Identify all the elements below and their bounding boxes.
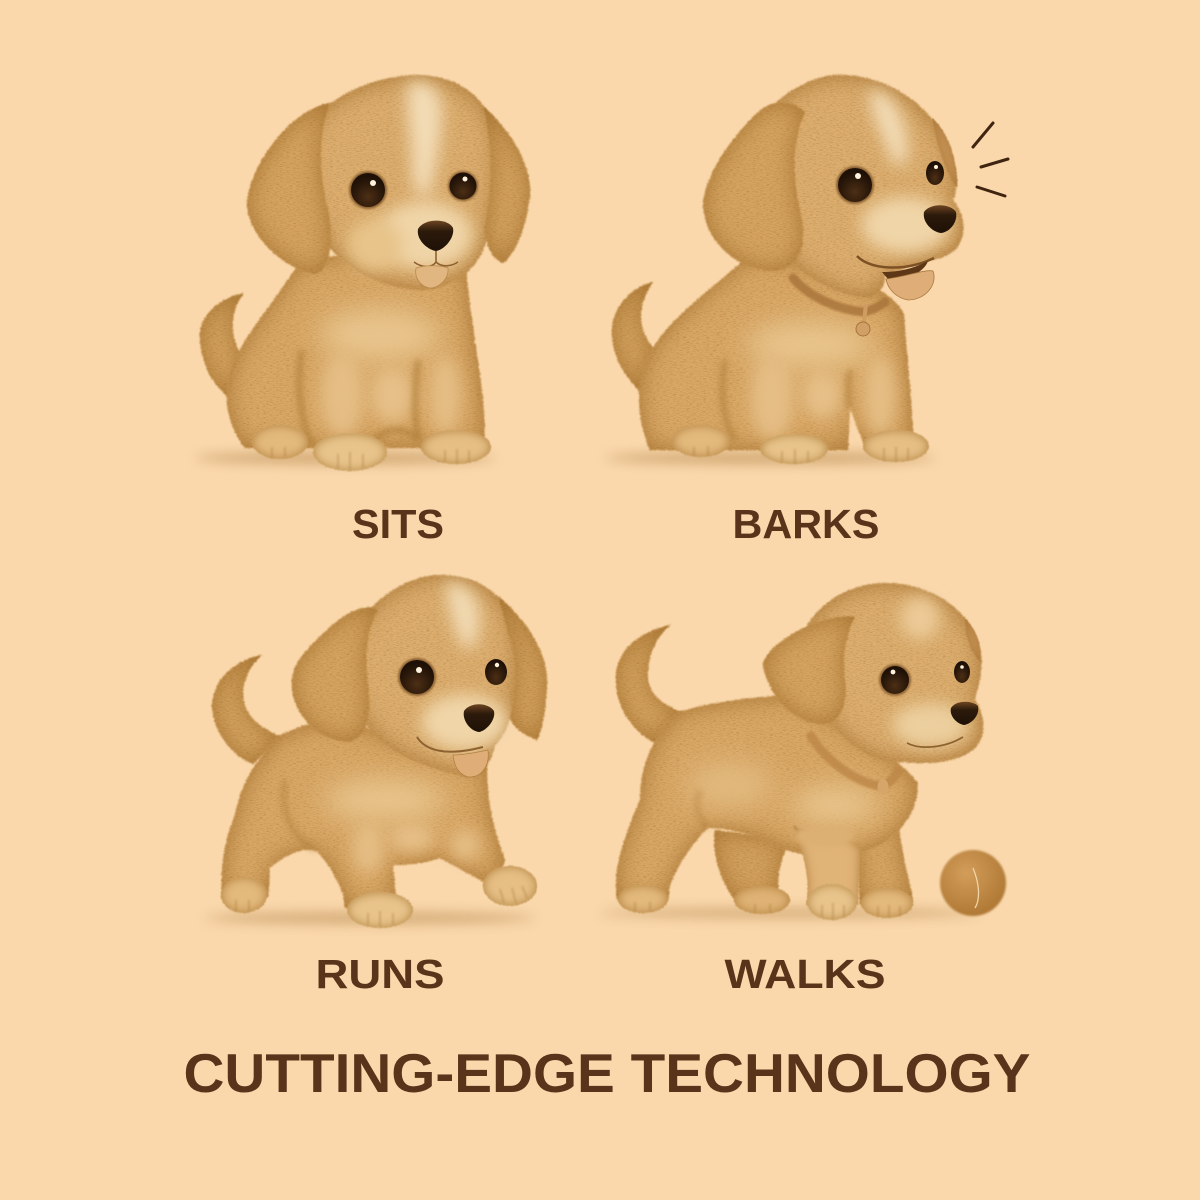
icon: bark lines — [973, 123, 1008, 196]
nose and mouth — [417, 704, 494, 777]
body — [222, 721, 505, 908]
label: walks: WALKS — [724, 951, 886, 997]
puppy: walks — [600, 583, 1006, 920]
nose and mouth — [414, 221, 458, 288]
forehead stripe and muzzle — [861, 88, 949, 253]
head — [799, 583, 983, 763]
nose and open mouth — [857, 205, 956, 300]
hidden back leg — [815, 400, 848, 450]
body shading and chest highlight — [299, 307, 461, 445]
ball — [940, 850, 1006, 916]
eyes — [879, 661, 970, 696]
head — [749, 75, 963, 298]
label: sits: SITS — [352, 501, 444, 547]
label: runs: RUNS — [316, 951, 444, 997]
eyes — [349, 171, 478, 209]
label: barks: BARKS — [732, 501, 880, 547]
eyes — [836, 161, 944, 204]
body shading and chest highlight — [722, 320, 896, 440]
body highlights — [284, 778, 480, 874]
left ear — [703, 103, 805, 271]
head — [299, 75, 498, 290]
body — [616, 695, 917, 900]
right ear — [483, 106, 530, 263]
left ear — [292, 608, 378, 742]
puppy: runs — [205, 575, 547, 928]
collar tag — [856, 304, 870, 336]
ground shadow — [205, 912, 535, 924]
far front leg — [855, 800, 913, 905]
body — [639, 255, 914, 450]
forehead and muzzle highlights — [892, 596, 968, 747]
body highlights — [685, 761, 880, 828]
paws — [618, 884, 913, 920]
ground shadow — [195, 452, 495, 464]
ground shadow — [605, 452, 935, 464]
forehead stripe and muzzle — [421, 582, 509, 750]
paws — [252, 425, 491, 471]
near leg blend — [795, 825, 855, 847]
right ear — [965, 618, 980, 662]
paws — [672, 425, 929, 464]
collar — [811, 736, 898, 786]
right ear — [498, 596, 547, 740]
collar tag — [878, 779, 888, 795]
tail — [612, 282, 654, 392]
head — [341, 575, 519, 777]
forehead stripe and muzzle — [347, 82, 473, 271]
body — [227, 245, 485, 448]
near front leg — [793, 825, 860, 905]
puppy: barks — [605, 75, 963, 464]
left ear — [763, 616, 855, 724]
title: CUTTING-EDGE TECHNOLOGY — [184, 1042, 1030, 1104]
tail — [212, 655, 282, 764]
nose and mouth — [907, 702, 978, 747]
tail — [200, 293, 244, 400]
middle hind leg — [714, 830, 790, 900]
right ear — [932, 118, 957, 188]
eyes — [398, 658, 507, 696]
puppy: sits — [195, 75, 530, 471]
tail — [616, 625, 682, 743]
paws — [221, 866, 537, 928]
left ear — [247, 103, 331, 274]
collar — [793, 278, 885, 312]
ground shadow — [600, 908, 980, 918]
